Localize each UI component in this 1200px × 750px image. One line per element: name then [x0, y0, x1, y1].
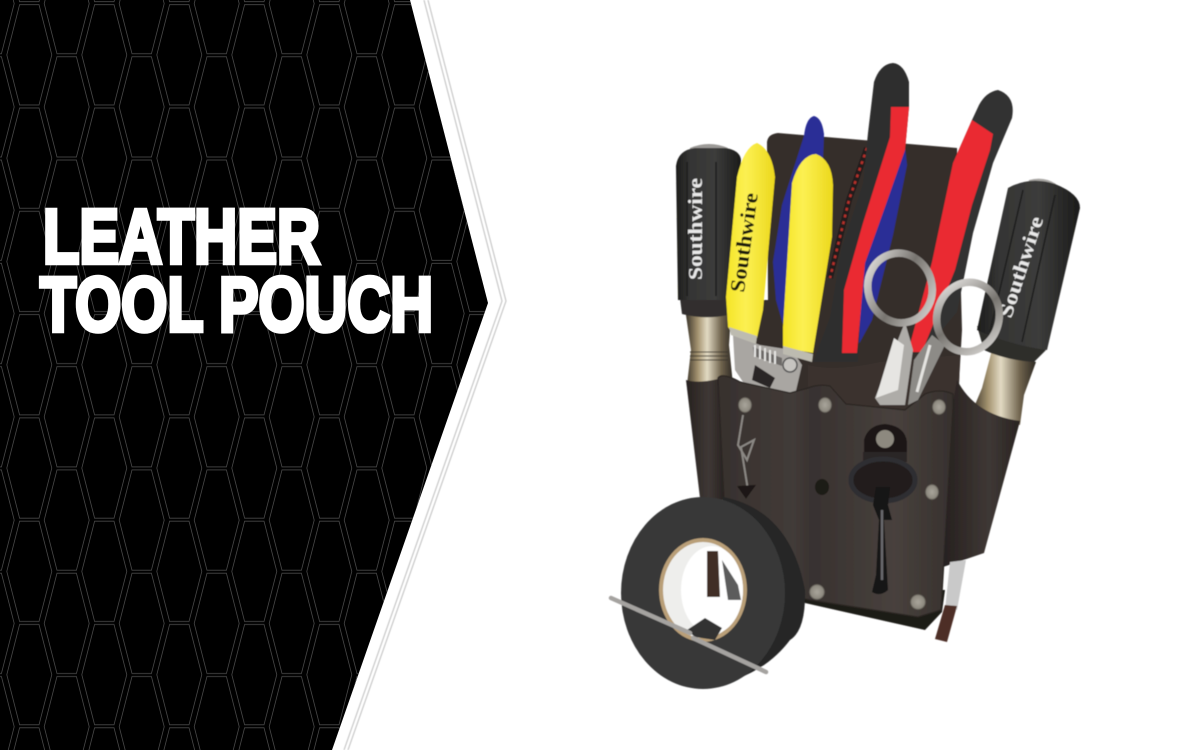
lanyard chain	[738, 415, 754, 497]
left side sleeve	[686, 378, 724, 500]
back pocket of pouch	[808, 355, 960, 420]
front panel of pouch	[718, 376, 953, 617]
title: LEATHER	[43, 194, 320, 280]
red and black pliers, left	[813, 63, 909, 362]
wire hanger across tape	[611, 598, 766, 672]
slotted screwdriver tip	[935, 560, 966, 642]
yellow plier grip, left	[725, 143, 775, 344]
brand text on left screwdriver: Southwire	[685, 178, 707, 280]
brand text on yellow grip: Southwire	[725, 191, 763, 294]
title: TOOL POUCH	[40, 262, 433, 348]
screwdriver, left	[676, 144, 741, 385]
title	[40, 194, 433, 348]
product photo: leather tool pouch with tools	[611, 63, 1080, 689]
blue pliers handles	[773, 116, 907, 360]
braided red and black cord	[830, 148, 867, 278]
double chevron outline	[344, 0, 506, 750]
red and black pliers, right	[908, 90, 1013, 352]
screwdriver, right	[972, 179, 1080, 425]
swivel hook and D-ring	[851, 424, 915, 594]
scissors finger rings	[860, 246, 1007, 359]
bottom plate of pouch	[790, 590, 945, 630]
back flap of pouch	[745, 133, 962, 400]
brand text on right screwdriver: Southwire	[995, 214, 1048, 321]
right side sleeve	[943, 380, 1020, 567]
pouch rivets	[738, 397, 946, 610]
scissors arms and blades	[875, 322, 945, 405]
metal plier head and spring	[733, 335, 802, 395]
black chevron panel with hexagon pattern	[0, 0, 488, 750]
yellow plier grip, right	[783, 154, 833, 362]
roll of black electrical tape	[621, 497, 805, 689]
